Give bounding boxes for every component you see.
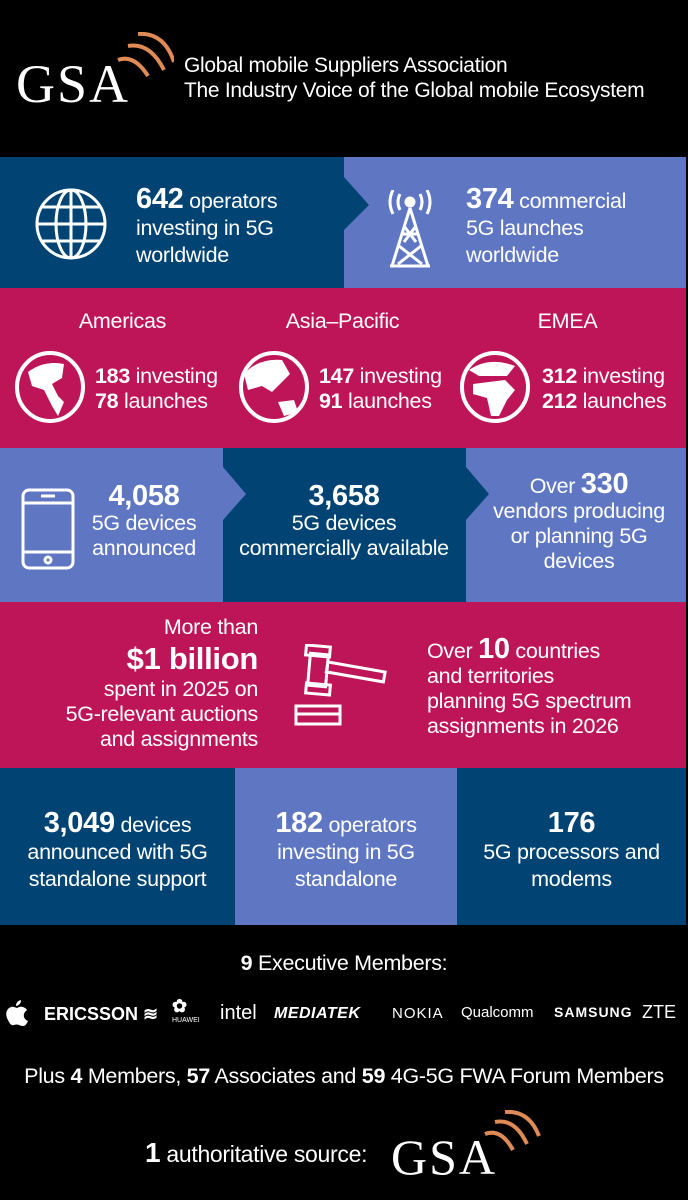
region: Asia-Pacific: Asia–Pacific — [286, 309, 399, 333]
stat: SA operators: standalone — [295, 867, 397, 891]
stat: launches: worldwide — [466, 243, 559, 267]
stat: vendors: vendors producing — [493, 499, 665, 523]
stat: countries — [427, 633, 631, 738]
stat: processors: 176 — [548, 807, 595, 839]
stat: countries: assignments in 2026 — [427, 714, 619, 738]
footer: authoritative source: 1 authoritative source: — [145, 1137, 367, 1168]
icon: americas globe — [15, 351, 85, 423]
member logos: HUAWEI — [172, 1017, 200, 1024]
stat: SA operators: 182 operators — [275, 807, 417, 839]
header text: The Industry Voice of the Global mobile Ecosystem — [184, 79, 644, 102]
panel: regions: 312 investing — [542, 364, 665, 388]
panel: regions: 183 investing — [95, 364, 218, 388]
panel: spectrum — [0, 602, 686, 768]
panel: regions: 212 launches — [542, 389, 666, 413]
stat: SA devices: 3,049 devices — [44, 807, 191, 839]
stat: billion: More than — [164, 615, 258, 639]
text: other members: Plus 4 Members, 57 Associates and 59 4G-5G FWA Forum Members — [24, 1064, 664, 1088]
stat: billion: $1 billion — [127, 641, 258, 676]
header logo — [16, 32, 174, 112]
member logos — [6, 996, 676, 1026]
stat: countries: and territories — [427, 664, 554, 688]
stat: operators: 642 operators — [136, 183, 277, 215]
stat: devices announced: announced — [92, 536, 196, 560]
member logos: ✿ — [172, 996, 187, 1016]
header text — [184, 54, 644, 102]
region: EMEA: EMEA — [538, 309, 597, 333]
stat: devices announced: 4,058 — [108, 480, 180, 512]
stat: launches: 374 commercial — [466, 183, 626, 215]
member logos: ZTE — [642, 1002, 676, 1022]
panel: regions: 147 investing — [319, 364, 442, 388]
stat: processors: modems — [531, 867, 612, 891]
member logos: MEDIATEK — [274, 1005, 360, 1022]
stat: billion: 5G-relevant auctions — [66, 702, 258, 726]
icon: asia globe — [239, 351, 309, 423]
stat: SA operators: investing in 5G — [277, 840, 415, 864]
stat: processors: 5G processors and — [483, 840, 660, 864]
stat: operators: worldwide — [136, 243, 229, 267]
panel: regions — [0, 288, 686, 448]
stat: operators — [136, 183, 277, 267]
region: Americas: Americas — [79, 309, 166, 333]
stat: devices available: commercially available — [239, 536, 449, 560]
row1 backgrounds — [0, 157, 686, 288]
stat: devices available: 3,658 — [308, 480, 380, 512]
icon: globe — [36, 188, 106, 260]
row3 backgrounds — [0, 448, 686, 602]
heading: executive members: 9 Executive Members: — [241, 951, 447, 975]
stat: vendors: Over 330 — [530, 468, 628, 500]
stat: devices announced: 5G devices — [92, 511, 196, 535]
footer: authoritative source — [145, 1110, 541, 1180]
stat: billion: and assignments — [100, 727, 258, 751]
stat: SA devices: announced with 5G — [27, 840, 208, 864]
stat: operators: investing in 5G — [136, 216, 274, 240]
header text: Global mobile Suppliers Association — [184, 54, 507, 77]
stat: SA devices — [27, 807, 208, 891]
member logos: ERICSSON ≋ — [44, 1004, 158, 1024]
stat: countries: Over 10 countries — [427, 633, 600, 665]
panel: standalone — [0, 768, 686, 925]
member logos: intel — [220, 1002, 257, 1024]
icon: tower — [388, 190, 432, 268]
stat: billion — [66, 615, 258, 751]
icon: gavel — [294, 644, 387, 726]
panel: regions: 91 launches — [319, 389, 432, 413]
stat: devices announced — [92, 480, 196, 560]
panel: regions: 78 launches — [95, 389, 208, 413]
stat: vendors: or planning 5G — [511, 524, 647, 548]
stat: vendors — [493, 468, 665, 573]
stat: launches — [466, 183, 626, 267]
member logos: Qualcomm — [461, 1004, 534, 1021]
member logos: NOKIA — [392, 1005, 444, 1022]
stat: countries: planning 5G spectrum — [427, 689, 631, 713]
stat: SA operators — [275, 807, 417, 891]
icon: phone — [22, 488, 74, 570]
stat: SA devices: standalone support — [29, 867, 206, 891]
stat: billion: spent in 2025 on — [104, 677, 258, 701]
member logos: SAMSUNG — [554, 1004, 633, 1020]
stat: processors — [483, 807, 660, 891]
stat: launches: 5G launches — [466, 216, 583, 240]
stat: devices available: 5G devices — [292, 511, 396, 535]
icon: emea globe — [460, 351, 530, 423]
stat: vendors: devices — [544, 549, 614, 573]
stat: devices available — [239, 480, 449, 560]
